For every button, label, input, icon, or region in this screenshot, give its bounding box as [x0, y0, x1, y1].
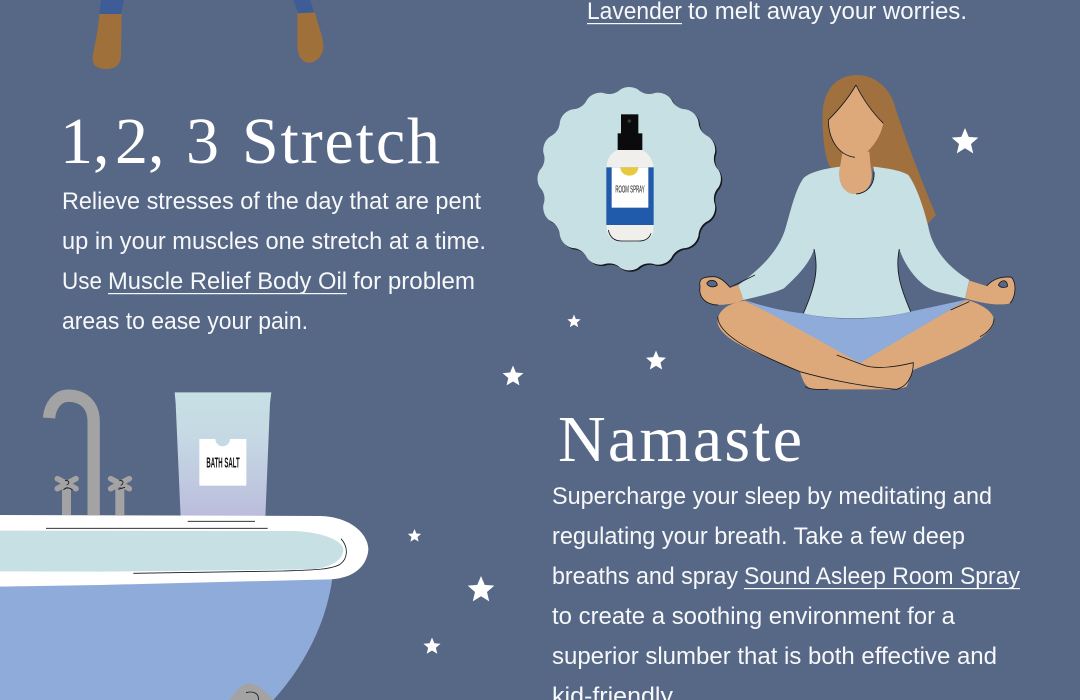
- text block: namaste: breaths and spray: [552, 563, 738, 590]
- text block: stretch: areas to ease your pain.: [62, 308, 308, 335]
- illustration: bathtub with faucet and bath salt: [0, 392, 368, 700]
- heading: 1, 2, 3 Stretch: 3: [186, 105, 219, 178]
- heading: 1, 2, 3 Stretch: Stretch: [242, 105, 440, 178]
- text block: stretch: up in your muscles one stretch at a time.: [62, 228, 486, 255]
- text block: namaste: to create a soothing environment for a: [552, 603, 956, 630]
- bath salt bag: [175, 392, 271, 518]
- heading: 1, 2, 3 Stretch: 2,: [115, 105, 164, 178]
- star: [952, 128, 978, 153]
- tub outlines: [46, 521, 346, 573]
- text block: stretch: Muscle Relief Body Oil: [108, 268, 347, 295]
- spray bottle: ROOM SPRAY: [615, 185, 645, 196]
- illustration: woman meditating: [700, 75, 1015, 389]
- star: [468, 576, 494, 601]
- star: [646, 350, 666, 369]
- star: [503, 366, 523, 385]
- text block: stretch: Relieve stresses of the day that are pent: [62, 188, 481, 215]
- text block: namaste: [552, 483, 1020, 700]
- hands: [700, 277, 743, 305]
- star: [408, 529, 421, 542]
- text block: namaste: superior slumber that is both effective and: [552, 643, 997, 670]
- icon: room spray in scalloped badge: [537, 87, 722, 272]
- outlines: [700, 85, 1015, 389]
- bath salt bag: BATH SALT: [206, 455, 240, 471]
- tub rim: [0, 515, 368, 587]
- text block: stretch: [62, 188, 486, 335]
- water: [0, 531, 343, 572]
- faucet: [49, 396, 129, 515]
- text block: stretch: Use: [62, 268, 102, 295]
- tub basin: [0, 578, 332, 700]
- star: [567, 314, 581, 327]
- shorts: [745, 299, 967, 365]
- icon: boots of standing figure: [93, 0, 323, 69]
- heading: Namaste: Namaste: [558, 403, 802, 476]
- hair: [823, 75, 936, 225]
- text block: namaste: regulating your breath. Take a few deep: [552, 523, 965, 550]
- shirt: [738, 167, 969, 318]
- spray bottle: [606, 114, 654, 241]
- decorative stars: [408, 128, 978, 654]
- text block: stretch: for problem: [353, 268, 475, 295]
- scalloped badge: [537, 87, 722, 272]
- neck: [839, 152, 872, 194]
- face: [828, 85, 883, 157]
- left leg: [718, 301, 913, 389]
- heading: 1, 2, 3 Stretch: [60, 105, 440, 178]
- right leg: [858, 300, 994, 389]
- text block: namaste: Supercharge your sleep by meditating and: [552, 483, 992, 510]
- star: [423, 638, 441, 654]
- heading: 1, 2, 3 Stretch: 1,: [60, 105, 110, 178]
- tub foot: [229, 683, 274, 700]
- text block: namaste: Sound Asleep Room Spray: [744, 563, 1020, 590]
